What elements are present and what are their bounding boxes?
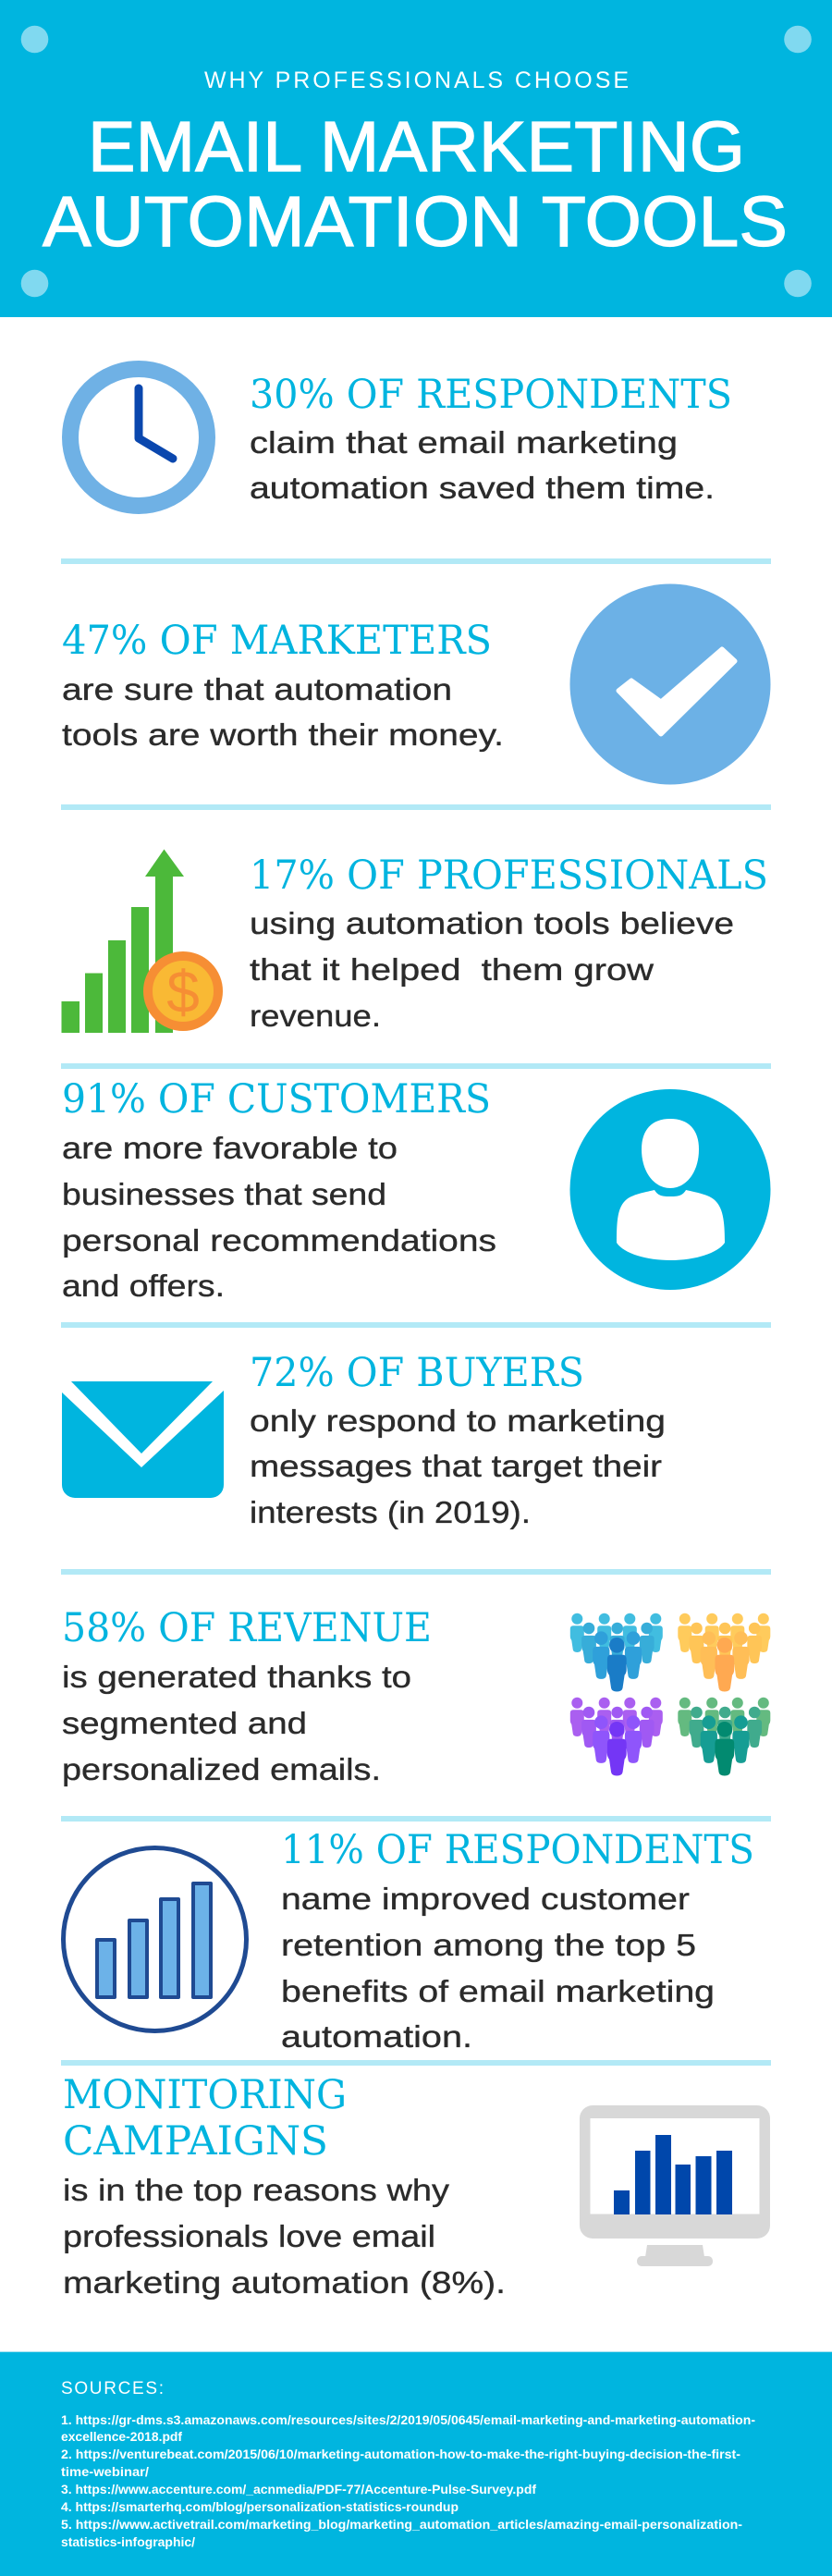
- heading: 11% OF RESPONDENTS: [281, 1827, 754, 1873]
- sources list: excellence-2018.pdf: [61, 2429, 182, 2444]
- heading: 91% OF CUSTOMERS: [62, 1076, 491, 1122]
- panel: sources footer: [0, 2351, 832, 2576]
- heading: MONITORING: [63, 2072, 347, 2118]
- text block: automation saved them time.: [250, 471, 715, 505]
- icon: check mark: [569, 584, 771, 784]
- heading: 72% OF BUYERS: [250, 1350, 584, 1396]
- heading: 58% OF REVENUE: [62, 1605, 432, 1651]
- text block: [63, 2173, 506, 2300]
- icon: growth chart with coin: [61, 849, 218, 1033]
- text block: personal recommendations: [62, 1223, 496, 1257]
- text block: are more favorable to: [62, 1131, 398, 1165]
- icon: growth chart with coin: $: [166, 959, 200, 1025]
- heading: 47% OF MARKETERS: [62, 618, 492, 664]
- panel: 58% of revenue: [62, 1605, 770, 1786]
- panel: 11% of respondents: [63, 1827, 754, 2054]
- icon: audience segments: [570, 1613, 770, 1776]
- text block: benefits of email marketing: [281, 1974, 715, 2008]
- text block: that it helped them grow: [250, 952, 654, 987]
- text block: is generated thanks to: [62, 1660, 411, 1694]
- text block: professionals love email: [63, 2219, 435, 2253]
- heading: 30% OF RESPONDENTS: [250, 372, 732, 418]
- text block: is in the top reasons why: [63, 2173, 450, 2207]
- sources list: statistics-infographic/: [61, 2534, 195, 2549]
- text block: claim that email marketing: [250, 425, 678, 460]
- sources list: 5. https://www.activetrail.com/marketing_blog/marketing_automation_articles/amazing-email-personalization-: [61, 2517, 742, 2532]
- sources list: 1. https://gr-dms.s3.amazonaws.com/resources/sites/2/2019/05/0645/email-marketing-and-marketing-automation-: [61, 2412, 755, 2427]
- icon: corner dots: [21, 26, 812, 297]
- icon: person: [569, 1089, 771, 1290]
- sources heading: SOURCES:: [61, 2379, 164, 2398]
- subtitle: WHY PROFESSIONALS CHOOSE: [204, 67, 629, 93]
- text block: only respond to marketing: [250, 1404, 666, 1438]
- panel: 91% of customers: [62, 1076, 771, 1303]
- sources list: 2. https://venturebeat.com/2015/06/10/marketing-automation-how-to-make-the-right-buying-decision-the-first-: [61, 2447, 740, 2461]
- text block: and offers.: [62, 1269, 225, 1303]
- sources list: 4. https://smarterhq.com/blog/personalization-statistics-roundup: [61, 2499, 459, 2514]
- text block: name improved customer: [281, 1882, 690, 1916]
- icon: monitor with chart: [580, 2105, 770, 2266]
- text block: interests (in 2019).: [250, 1495, 531, 1529]
- panel: 17% of professionals: [61, 849, 768, 1033]
- icon: bar chart in circle: [63, 1847, 246, 2030]
- text block: revenue.: [250, 999, 381, 1033]
- text block: segmented and: [62, 1706, 307, 1740]
- icon: envelope: [61, 1380, 225, 1498]
- text block: personalized emails.: [62, 1752, 381, 1786]
- text block: [250, 1404, 666, 1529]
- text block: automation.: [281, 2019, 472, 2054]
- text block: messages that target their: [250, 1449, 662, 1483]
- heading: 17% OF PROFESSIONALS: [250, 853, 768, 899]
- text block: marketing automation (8%).: [63, 2265, 506, 2300]
- text block: [62, 1660, 411, 1786]
- heading: [63, 2072, 347, 2165]
- sources list: time-webinar/: [61, 2464, 149, 2479]
- text block: [62, 672, 504, 752]
- text block: using automation tools believe: [250, 906, 734, 940]
- panel: monitoring campaigns: [63, 2072, 770, 2300]
- text block: tools are worth their money.: [62, 718, 504, 752]
- title: [43, 107, 788, 262]
- text block: are sure that automation: [62, 672, 452, 706]
- panel: 72% of buyers: [61, 1350, 666, 1529]
- text block: [281, 1882, 715, 2054]
- heading: CAMPAIGNS: [63, 2118, 328, 2165]
- text block: [250, 906, 734, 1033]
- title: AUTOMATION TOOLS: [43, 182, 788, 262]
- panel: 30% of respondents: [70, 369, 732, 506]
- icon: clock: [70, 369, 207, 506]
- sources list: [61, 2412, 755, 2549]
- text block: businesses that send: [62, 1177, 386, 1211]
- sources list: 3. https://www.accenture.com/_acnmedia/PDF-77/Accenture-Pulse-Survey.pdf: [61, 2482, 536, 2496]
- title: EMAIL MARKETING: [88, 107, 745, 187]
- panel: 47% of marketers: [62, 584, 771, 784]
- text block: [62, 1131, 496, 1303]
- text block: [250, 425, 715, 505]
- panel: header banner: [0, 0, 832, 317]
- text block: retention among the top 5: [281, 1928, 696, 1962]
